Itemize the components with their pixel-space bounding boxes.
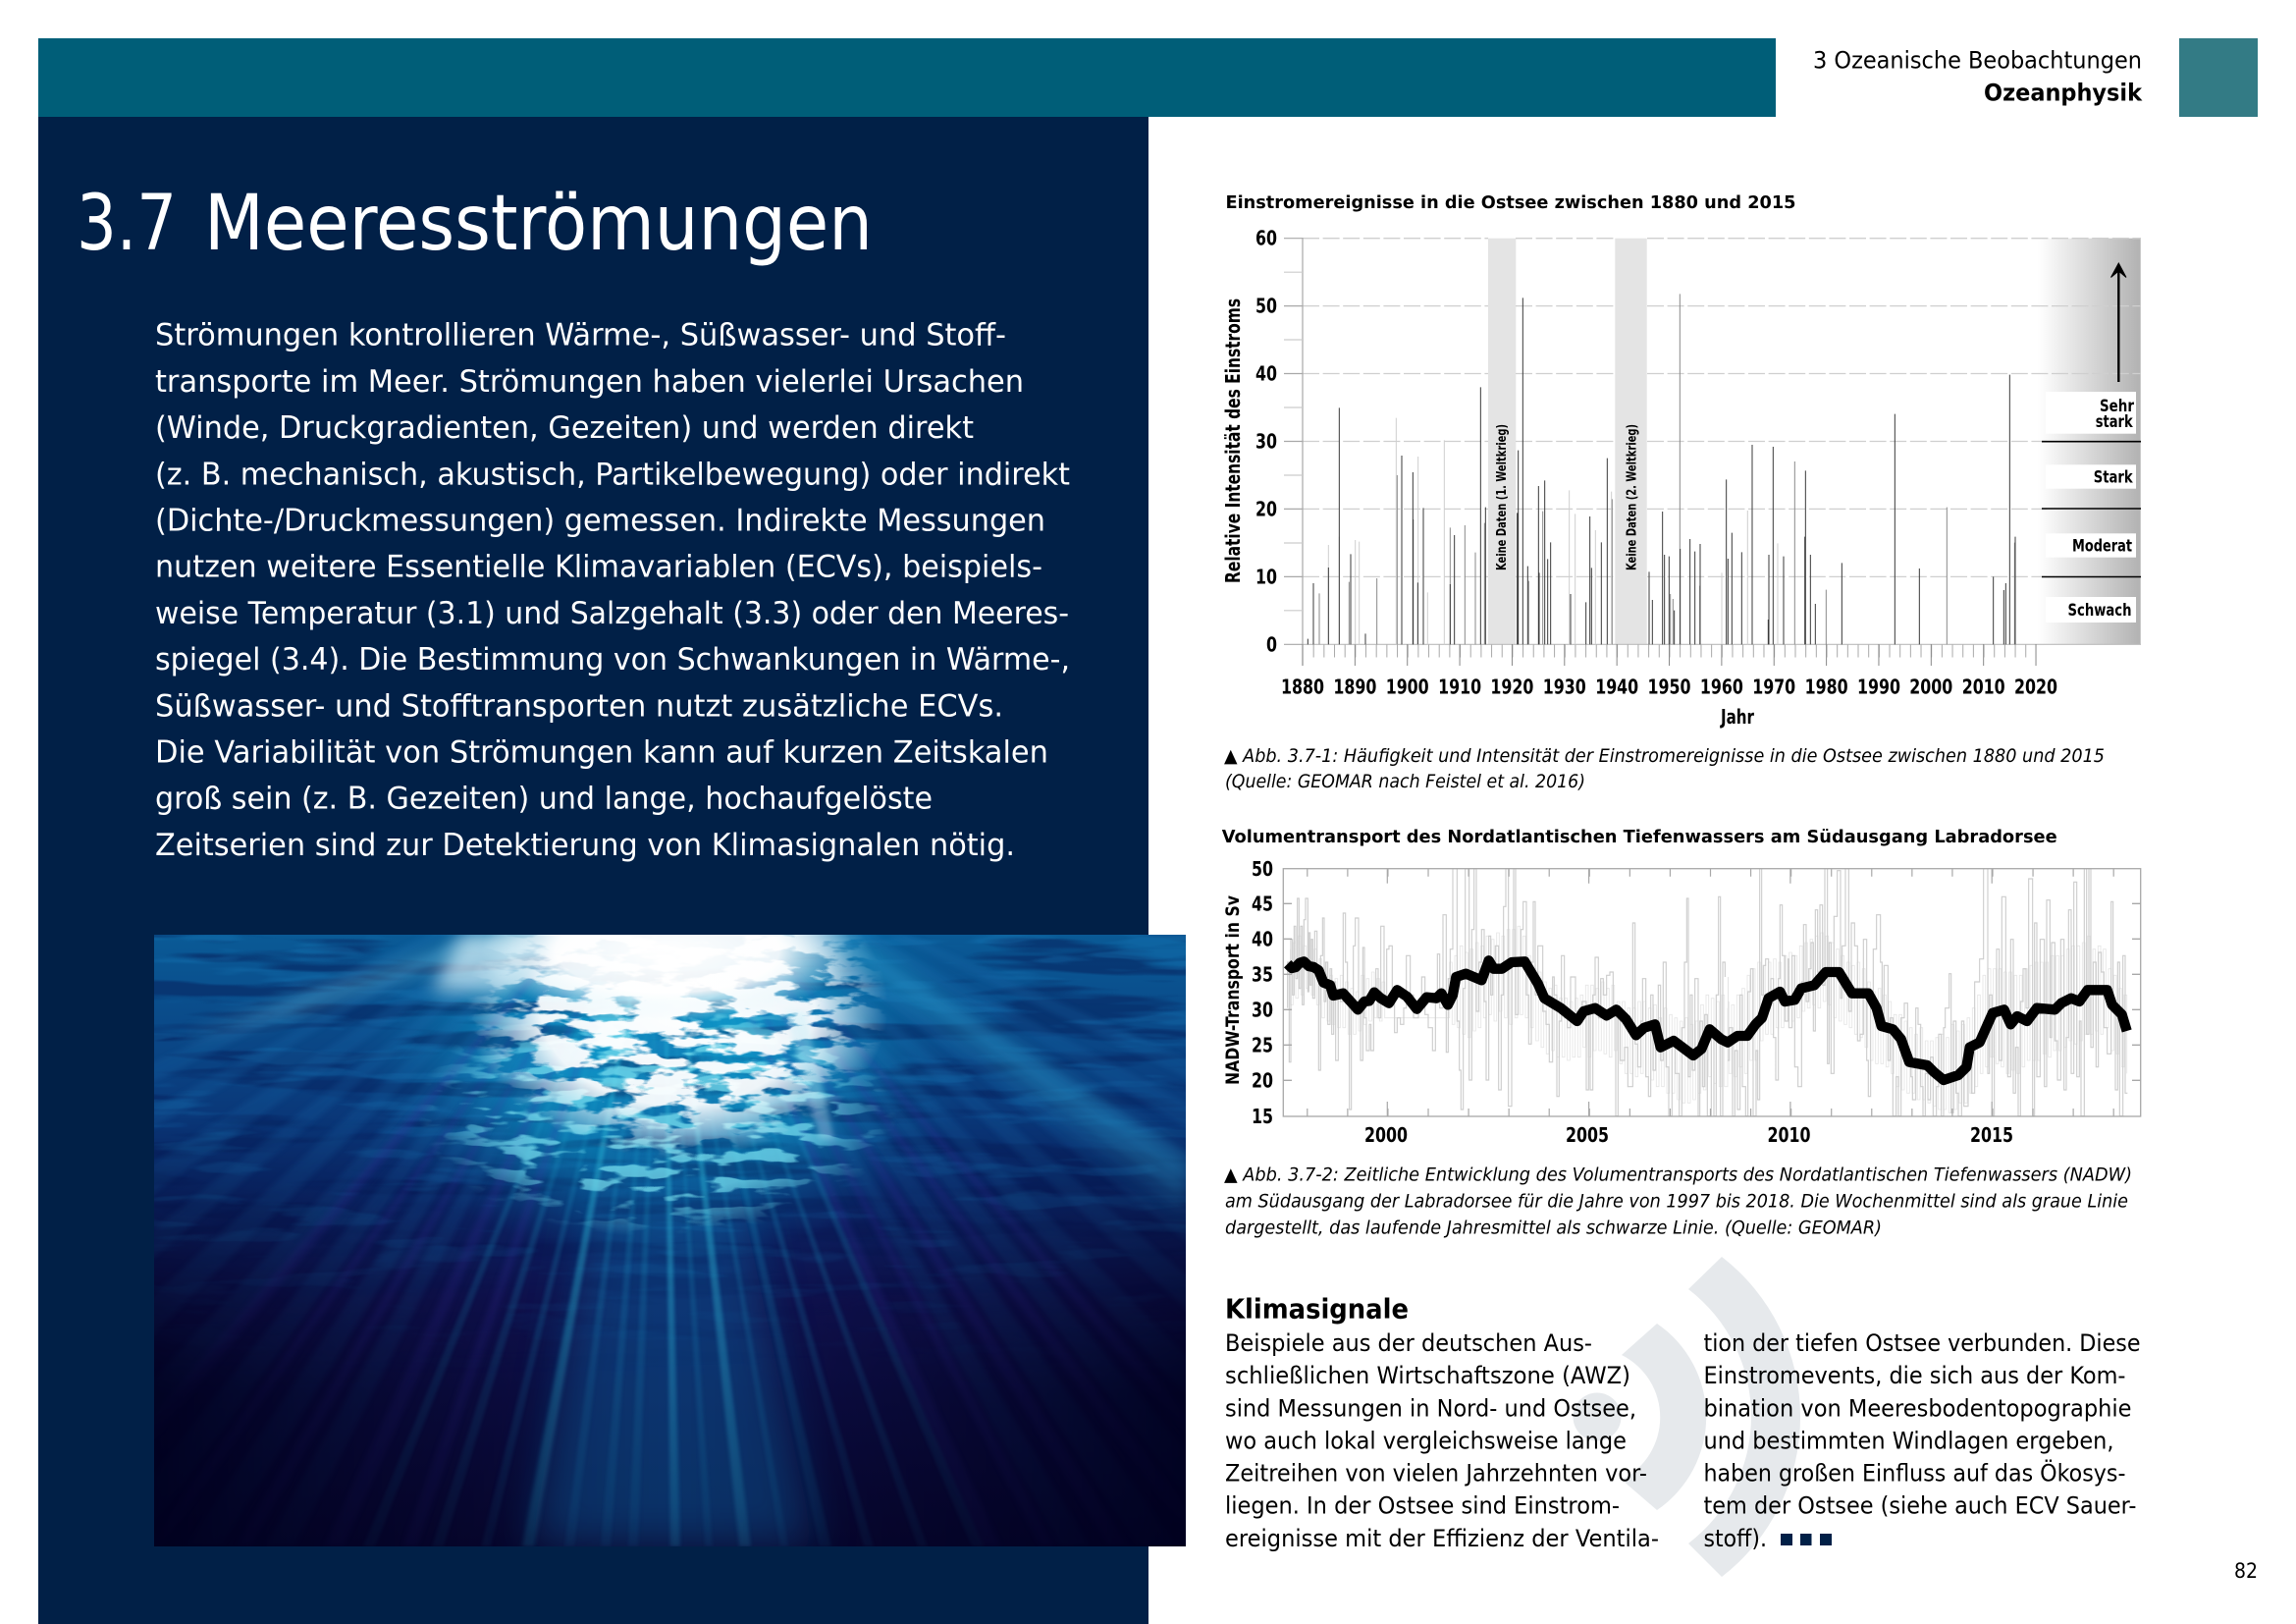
y axis numbers: 30 — [1252, 998, 1273, 1021]
caption 2 — [1224, 1164, 2132, 1239]
x axis years: 1940 — [1595, 676, 1638, 699]
intensity labels: Sehr — [2100, 397, 2134, 416]
x axis years: 1880 — [1281, 676, 1324, 699]
x axis years: 2000 — [1364, 1123, 1408, 1147]
x axis years: 2020 — [2014, 676, 2057, 699]
x axis years: 1990 — [1857, 676, 1900, 699]
chart: Einstromereignisse — [1221, 227, 2141, 729]
intro text block: (Winde, Druckgradienten, Gezeiten) und werden direkt — [155, 410, 974, 446]
y axis numbers — [1255, 227, 1277, 656]
intensity labels: Schwach — [2067, 601, 2132, 621]
y axis numbers: 50 — [1252, 857, 1273, 881]
header section label: Ozeanphysik — [1984, 80, 2143, 107]
intro text block: Strömungen kontrollieren Wärme-, Süßwasser- und Stoff- — [155, 318, 1006, 353]
x axis years: 1890 — [1333, 676, 1376, 699]
caption 2: am Südausgang der Labradorsee für die Jahre von 1997 bis 2018. Die Wochenmittel sind als graue Linie — [1225, 1190, 2128, 1212]
intro text block: transporte im Meer. Strömungen haben vielerlei Ursachen — [155, 364, 1024, 400]
arrow: increasing intensity — [2110, 263, 2126, 382]
panel: left dark blue — [38, 117, 1148, 1624]
x axis years: 1930 — [1543, 676, 1586, 699]
intensity labels — [2042, 392, 2141, 623]
y axis numbers — [1252, 857, 1273, 1128]
y axis numbers: 25 — [1252, 1033, 1273, 1056]
text column 1: wo auch lokal vergleichsweise lange — [1225, 1428, 1627, 1455]
intensity labels: Moderat — [2072, 537, 2132, 557]
no-data band: World War II: Keine Daten (2. Weltkrieg) — [1625, 424, 1640, 570]
y axis numbers: 20 — [1255, 497, 1277, 520]
no-data band: World War II — [1615, 239, 1647, 644]
text column 1: Beispiele aus der deutschen Aus- — [1225, 1329, 1592, 1357]
y axis numbers: 15 — [1252, 1105, 1273, 1128]
y axis title: Relative Intensität des Einstroms — [1221, 298, 1245, 583]
x axis years: 1970 — [1752, 676, 1795, 699]
intro text block: Die Variabilität von Strömungen kann auf kurzen Zeitskalen — [155, 734, 1048, 770]
caption 1 — [1224, 745, 2105, 792]
header bar — [38, 38, 1776, 117]
x axis years — [1281, 676, 2057, 699]
event bars — [1308, 294, 1784, 644]
plot frame and ticks — [1283, 869, 2141, 1116]
text column 2: und bestimmten Windlagen ergeben, — [1704, 1428, 2114, 1455]
intro text block: Süßwasser- und Stofftransporten nutzt zusätzliche ECVs. — [155, 688, 1003, 724]
intro text block: groß sein (z. B. Gezeiten) und lange, hochaufgelöste — [155, 782, 933, 817]
text column 2: tem der Ostsee (siehe auch ECV Sauer- — [1704, 1492, 2136, 1520]
header section label — [1813, 47, 2143, 107]
caption 1: (Quelle: GEOMAR nach Feistel et al. 2016) — [1225, 771, 1585, 792]
no-data band: World War I — [1488, 239, 1516, 644]
y axis numbers: 20 — [1252, 1068, 1273, 1092]
x axis years: 2010 — [1767, 1123, 1810, 1147]
x axis years: 1960 — [1700, 676, 1743, 699]
heading: Klimasignale: Klimasignale — [1225, 1294, 1409, 1326]
intro text block — [155, 318, 1070, 863]
text column 2: tion der tiefen Ostsee verbunden. Diese — [1704, 1329, 2140, 1357]
caption 2: ▲ Abb. 3.7-2: Zeitliche Entwicklung des Volumentransports des Nordatlantischen Tiefenwassers (NADW) — [1224, 1164, 2132, 1186]
intro text block: (z. B. mechanisch, akustisch, Partikelbewegung) oder indirekt — [155, 457, 1070, 492]
text column 2: stoff). — [1704, 1525, 1767, 1552]
y axis numbers: 50 — [1255, 295, 1277, 318]
x axis years: 2010 — [1962, 676, 2005, 699]
title: Meeresströmungen — [204, 180, 873, 268]
y axis title: NADW-Transport in Sv — [1222, 894, 1244, 1085]
text column 2: bination von Meeresbodentopographie — [1704, 1394, 2132, 1422]
y axis numbers: 40 — [1252, 927, 1273, 950]
text column 1: ereignisse mit der Effizienz der Ventila- — [1225, 1525, 1659, 1552]
x axis years: 2015 — [1970, 1123, 2013, 1147]
icon: light grey signal quote mark — [1573, 1257, 1800, 1577]
x axis years: 2000 — [1909, 676, 1952, 699]
text column 2 — [1704, 1329, 2140, 1552]
text column 1 — [1225, 1329, 1659, 1552]
caption 2: dargestellt, das laufende Jahresmittel als schwarze Linie. (Quelle: GEOMAR) — [1225, 1218, 1882, 1239]
text column 2: haben großen Einfluss auf das Ökosys- — [1704, 1459, 2126, 1487]
no-data band: World War I: Keine Daten (1. Weltkrieg) — [1494, 424, 1510, 570]
x axis years: 1900 — [1386, 676, 1429, 699]
caption 1: ▲ Abb. 3.7-1: Häufigkeit und Intensität der Einstromereignisse in die Ostsee zwischen 1880 und 2015 — [1224, 745, 2105, 767]
intro text block: weise Temperatur (3.1) und Salzgehalt (3.3) oder den Meeres- — [155, 596, 1069, 631]
intro text block: Zeitserien sind zur Detektierung von Klimasignalen nötig. — [155, 828, 1015, 863]
intro text block: nutzen weitere Essentielle Klimavariablen (ECVs), beispiels- — [155, 550, 1042, 585]
header teal square — [2179, 38, 2258, 117]
title: 3.7 — [77, 180, 177, 268]
end marks: three squares — [1781, 1534, 1832, 1545]
text column 1: Zeitreihen von vielen Jahrzehnten vor- — [1225, 1459, 1647, 1487]
x axis years: 1920 — [1490, 676, 1533, 699]
intro text block: spiegel (3.4). Die Bestimmung von Schwankungen in Wärme-, — [155, 642, 1070, 677]
intro text block: (Dichte-/Druckmessungen) gemessen. Indirekte Messungen — [155, 503, 1045, 538]
text column 1: sind Messungen in Nord- und Ostsee, — [1225, 1394, 1636, 1422]
intensity labels: stark — [2096, 412, 2133, 432]
x axis years — [1364, 1123, 2013, 1147]
x axis title: Jahr — [1719, 705, 1754, 729]
photo: underwater sun rays — [154, 935, 1186, 1546]
y axis numbers: 60 — [1255, 227, 1277, 250]
y axis numbers: 40 — [1255, 361, 1277, 385]
y axis numbers: 0 — [1266, 632, 1277, 656]
y axis numbers: 30 — [1255, 430, 1277, 454]
axes — [1284, 238, 2141, 666]
y axis numbers: 35 — [1252, 962, 1273, 986]
text column 2: Einstromevents, die sich aus der Kom- — [1704, 1362, 2126, 1389]
x axis years: 1950 — [1647, 676, 1690, 699]
annual mean black line — [1288, 960, 2127, 1080]
intensity labels: Stark — [2094, 468, 2133, 488]
chart: NADW transport — [1222, 857, 2141, 1147]
chart title 1: Einstromereignisse in die Ostsee zwischen 1880 und 2015 — [1225, 192, 1796, 213]
text column 1: liegen. In der Ostsee sind Einstrom- — [1225, 1492, 1620, 1520]
x axis years: 1980 — [1805, 676, 1848, 699]
chart title 2: Volumentransport des Nordatlantischen Tiefenwassers am Südausgang Labradorsee — [1222, 827, 2057, 847]
header section label: 3 Ozeanische Beobachtungen — [1813, 47, 2142, 75]
x axis years: 1910 — [1438, 676, 1481, 699]
y axis numbers: 10 — [1255, 565, 1277, 588]
y axis numbers: 45 — [1252, 892, 1273, 915]
x axis years: 2005 — [1566, 1123, 1609, 1147]
weekly mean grey line — [1288, 869, 2127, 1116]
intensity scale gradient — [2038, 239, 2141, 644]
text column 1: schließlichen Wirtschaftszone (AWZ) — [1225, 1362, 1630, 1389]
page number: 82 — [2234, 1559, 2258, 1583]
